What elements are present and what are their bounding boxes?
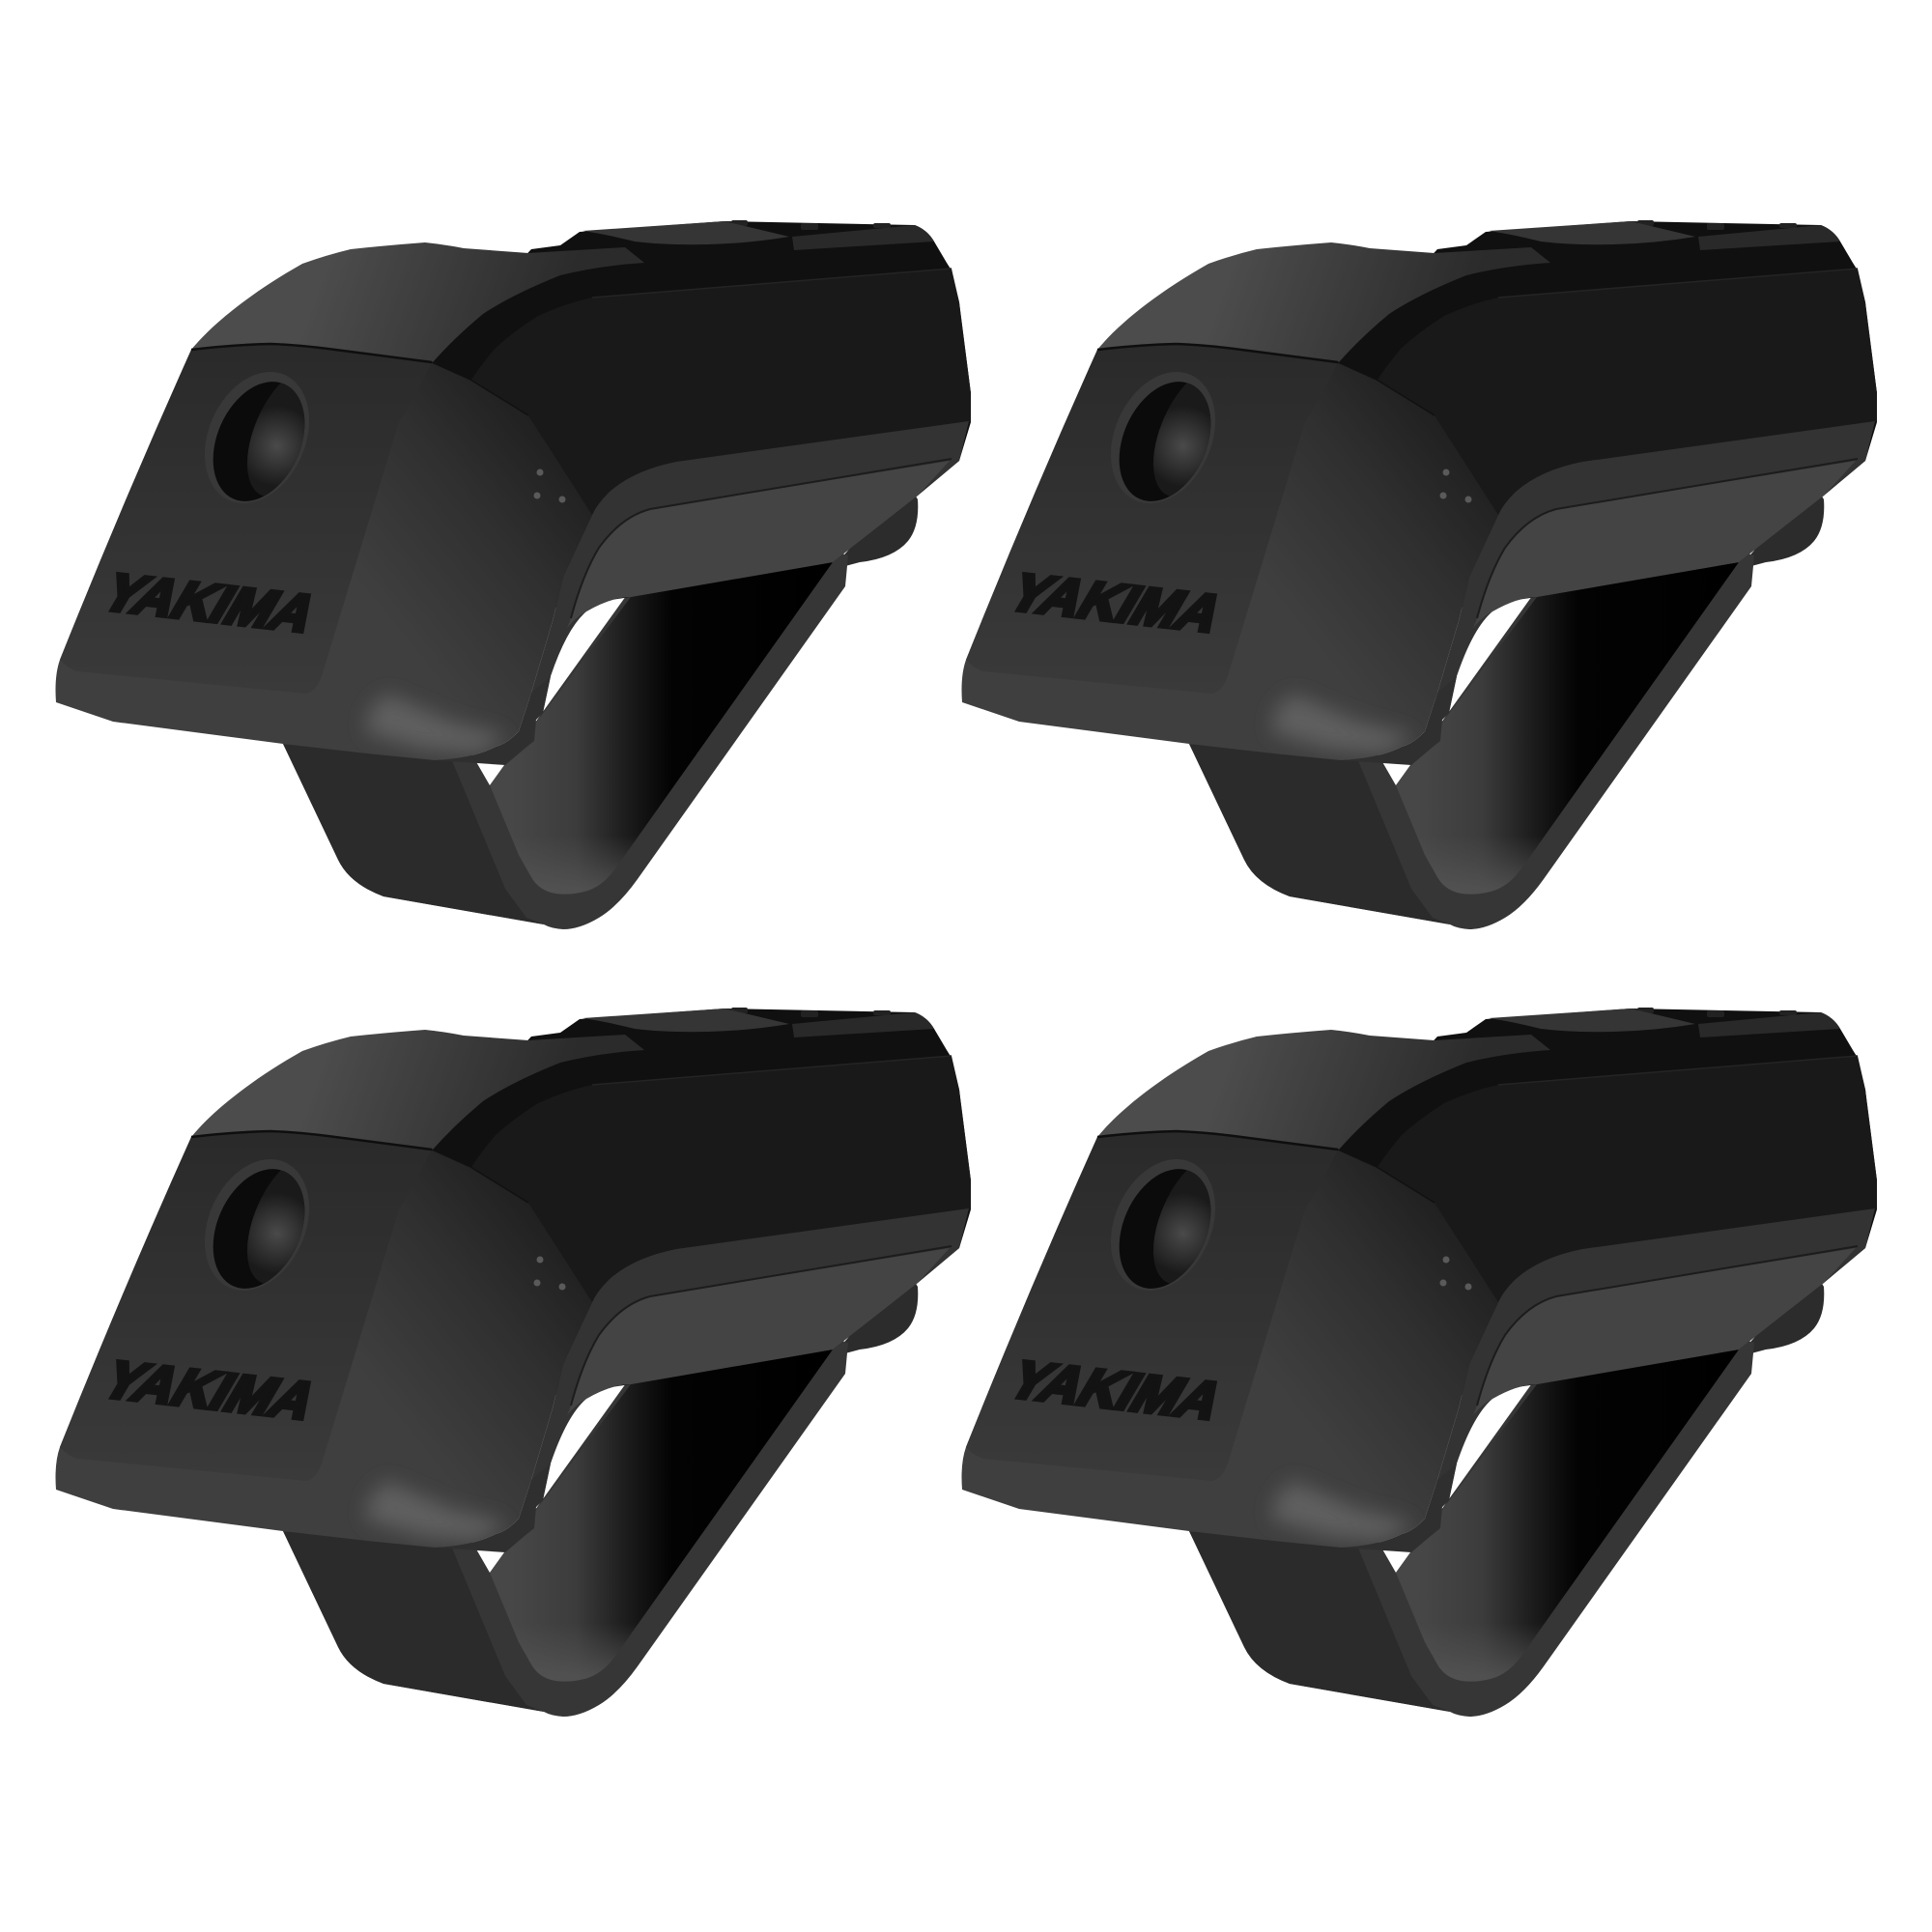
housing: top right <box>962 220 1877 765</box>
strap: bottom right <box>1189 1270 1824 1717</box>
strap: bottom left <box>283 1270 918 1717</box>
key lock hole: bottom left <box>185 1142 350 1307</box>
key lock hole: top left <box>185 355 350 520</box>
product: tower foot, bottom left <box>56 1008 971 1717</box>
housing: top left <box>56 220 971 765</box>
housing: bottom right <box>962 1008 1877 1552</box>
housing: bottom left <box>56 1008 971 1552</box>
key lock hole: top right <box>1091 355 1256 520</box>
logo: bottom left: YAKIMA <box>91 1351 329 1431</box>
logo: bottom right: YAKIMA <box>997 1351 1236 1431</box>
logo: top right: YAKIMA <box>997 564 1236 643</box>
strap: top left <box>283 483 918 929</box>
product: tower foot, top left <box>56 220 971 929</box>
key lock hole: bottom right <box>1091 1142 1256 1307</box>
logo: top left: YAKIMA <box>91 564 329 643</box>
product: tower foot, top right <box>962 220 1877 929</box>
product: tower foot, bottom right <box>962 1008 1877 1717</box>
strap: top right <box>1189 483 1824 929</box>
